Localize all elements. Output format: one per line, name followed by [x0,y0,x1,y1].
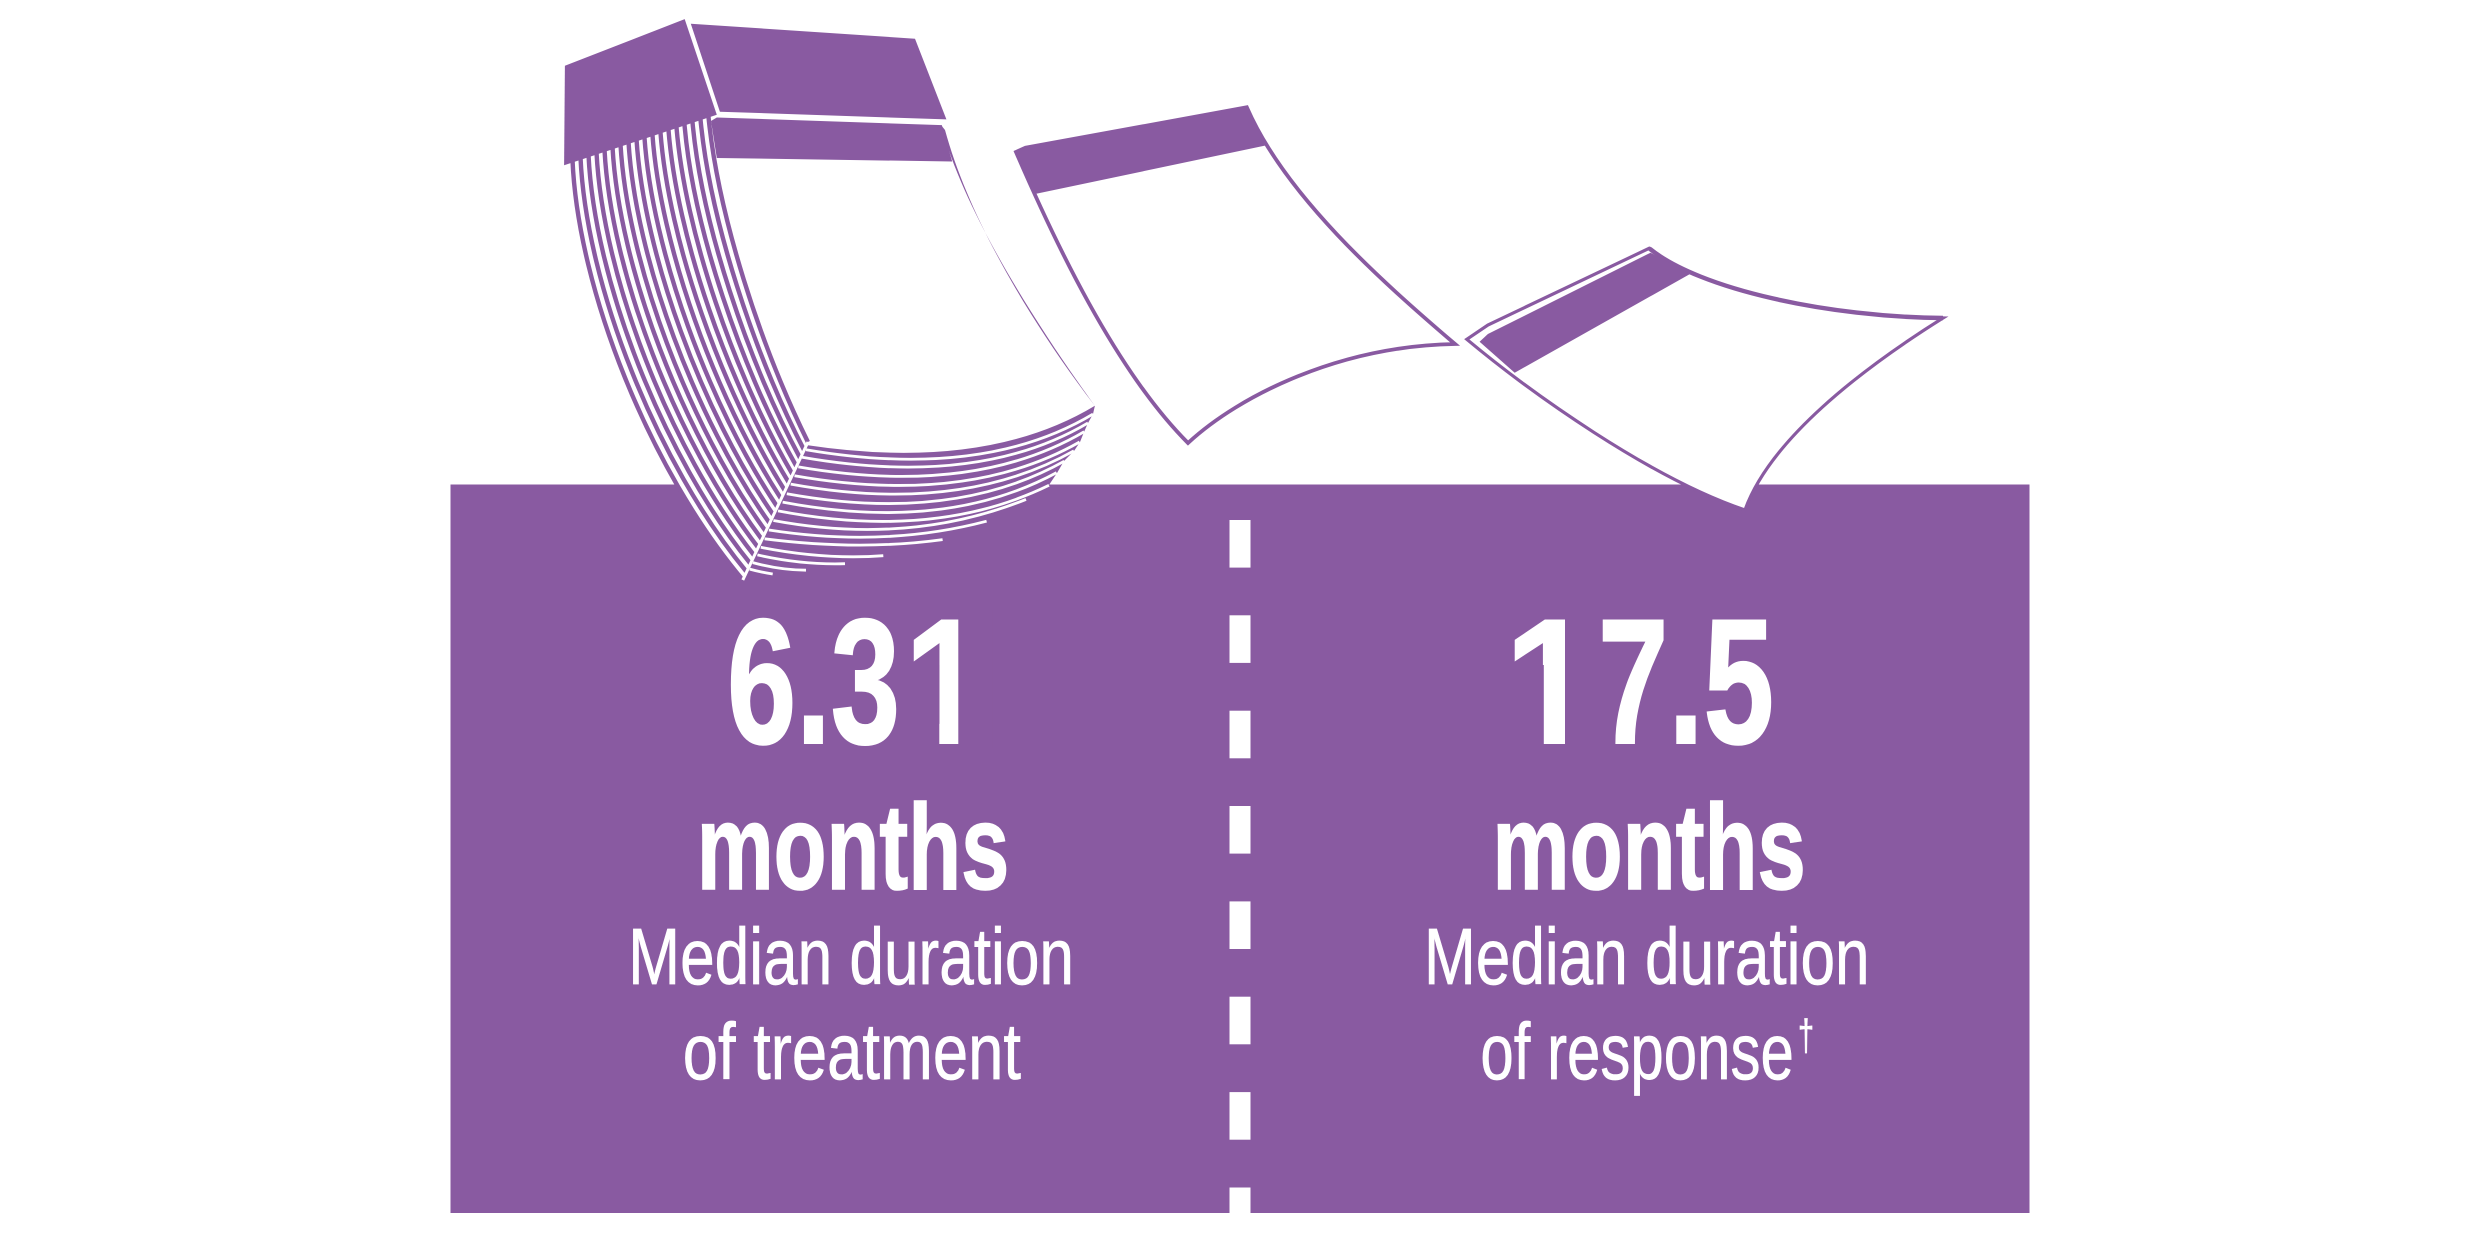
stack side: white page block [572,116,808,580]
unit: months: months [1492,779,1806,915]
stat: median duration of response [1424,582,1870,1096]
icon: stack of calendar pages [564,19,1095,580]
stack side: curved page edges [572,116,808,580]
stack corner: white diagonal edge [743,442,808,580]
value: 17.5: 7.5 [1598,582,1774,781]
icon: falling calendar page, middle [1016,107,1455,443]
label line 1: Median duration [628,912,1074,1001]
top page: right edge [941,125,1095,406]
value: 17.5 [1498,582,1774,781]
stat: median duration of treatment [628,582,1074,1096]
label line 1: Median duration [1424,912,1870,1001]
divider: dashed vertical line [1230,520,1250,1213]
icon: falling calendar page, right [1467,248,1943,510]
unit: months: months [697,779,1009,915]
page outline [1467,248,1943,510]
stack bottom: purple band behind page edges [788,406,1095,500]
page outline [1016,107,1455,443]
calendar binding: left block [564,19,717,165]
value: 6.31: 1 [904,582,991,781]
page top edge: thicker curved stroke [1649,248,1943,318]
panel: purple background [450,484,2030,1213]
calendar binding: upper right block [691,24,946,119]
value: 6.31: 6.3 [727,582,900,781]
page header band [1480,253,1690,373]
value: 17.5: 1 [1504,582,1599,781]
top page: header band [711,118,952,162]
footnote marker: dagger: † [1798,1011,1814,1060]
label line 2: of treatment [683,1007,1021,1096]
page header band [1016,107,1268,194]
label line 2: of response [1480,1007,1794,1096]
stack bottom: curved white page edges [750,414,1093,574]
